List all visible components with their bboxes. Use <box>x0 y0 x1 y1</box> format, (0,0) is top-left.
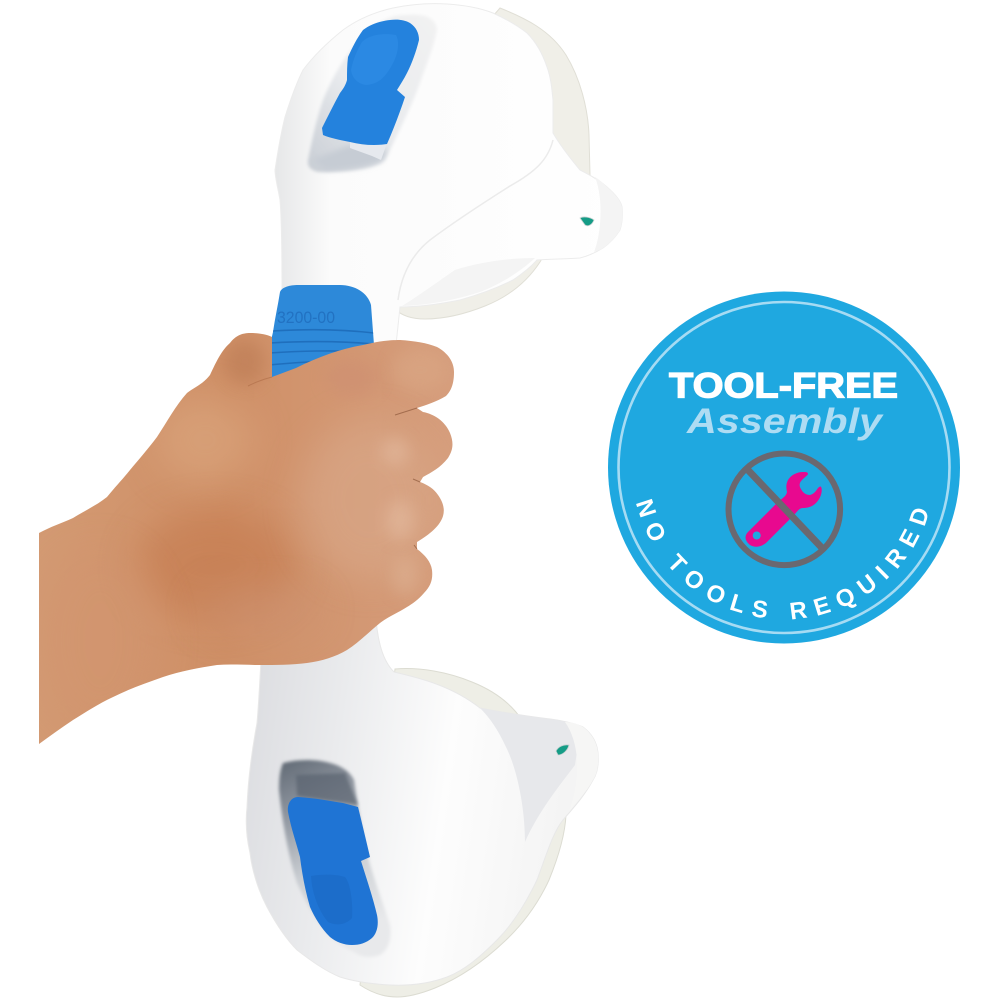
bottom cup body <box>246 620 598 985</box>
wrench <box>746 472 822 547</box>
badge inner ring <box>618 302 950 633</box>
top cup lower shadow <box>402 258 535 306</box>
hand gripping the bar <box>39 333 454 744</box>
top cup slot <box>308 15 437 172</box>
bottom cup nozzle <box>565 722 598 811</box>
bottom paddle thumb recess <box>311 875 352 924</box>
bottom paddle lever <box>288 797 378 945</box>
prohibition ring <box>728 454 840 565</box>
top slot inner shadow <box>312 145 387 170</box>
top teal indicator <box>580 217 594 226</box>
product: bottom suction cup <box>246 620 598 997</box>
top paddle lever <box>322 20 419 145</box>
badge: tool-free assembly <box>608 292 960 644</box>
prohibition slash <box>747 469 823 549</box>
finger creases <box>395 408 420 549</box>
icon: no tools wrench <box>728 454 840 565</box>
bottom teal indicator <box>556 745 569 755</box>
hand shading <box>74 342 432 720</box>
blue rubber grip <box>268 285 374 380</box>
top suction flange <box>395 8 590 319</box>
badge heading: TOOL-FREE <box>669 366 898 406</box>
bottom slot dark core <box>296 773 358 805</box>
top paddle underside <box>350 142 387 160</box>
grip model number: 3200-00 <box>277 308 335 327</box>
product: top suction cup <box>275 4 622 345</box>
grip ribs <box>268 330 374 365</box>
top nozzle tip <box>594 177 622 252</box>
top cup crease line <box>398 140 553 300</box>
bottom suction flange <box>360 669 566 997</box>
bottom cup shading <box>480 708 583 842</box>
top paddle thumb recess <box>351 34 398 85</box>
badge curved text: NO TOOLS REQUIRED <box>636 498 928 620</box>
top cup body <box>275 4 622 345</box>
badge subheading: Assembly <box>686 402 884 441</box>
badge disc <box>608 292 960 644</box>
bottom cup slot <box>279 760 391 957</box>
thumb crease <box>248 377 272 386</box>
